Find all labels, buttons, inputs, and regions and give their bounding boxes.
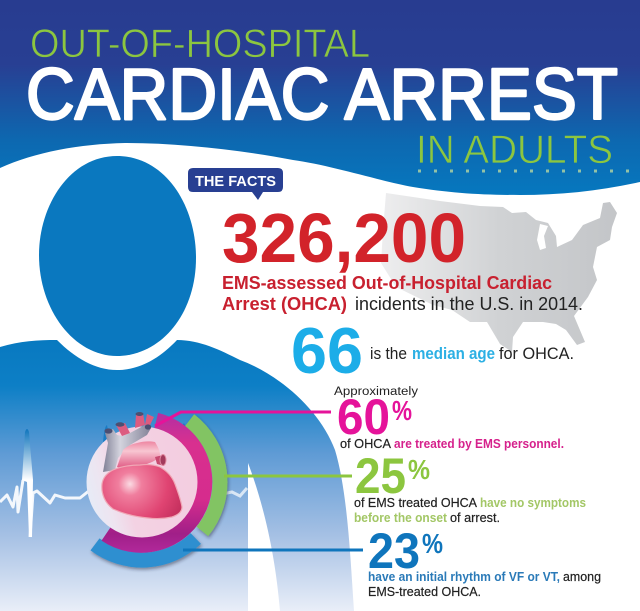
stat: 60 percent: 60 (337, 389, 390, 445)
stat: 60 percent: % (392, 395, 412, 426)
stat: 23 percent: % (422, 528, 443, 559)
stat: 25 percent: of arrest. (450, 511, 500, 525)
badge: the facts (188, 168, 283, 200)
badge: the facts: THE FACTS (195, 173, 276, 190)
stat: 23 percent: have an initial rhythm of VF or VT, (368, 570, 560, 584)
stat: 326,200 (222, 199, 583, 314)
stat: 23 percent: among (563, 570, 601, 584)
stat: 23 percent (368, 523, 601, 599)
stat: 25 percent: of EMS treated OHCA (354, 496, 478, 510)
stat: 326,200: EMS-assessed Out-of-Hospital Cardiac (222, 273, 552, 293)
person silhouette (0, 156, 354, 611)
stat: 25 percent (354, 448, 586, 525)
torso with shoulders (0, 340, 354, 611)
title line: out-of-hospital: OUT-OF-HOSPITAL (30, 22, 370, 66)
pale disc (86, 426, 198, 538)
small side vessel (155, 455, 164, 466)
map of the United States (381, 193, 617, 352)
stat: 23 percent: 23 (368, 523, 420, 579)
title line: cardiac arrest: CARDIAC ARREST (26, 55, 618, 135)
stat: 66 median age (291, 314, 574, 387)
connector: blue (183, 548, 363, 552)
stat: 326,200: 326,200 (222, 199, 466, 277)
pink vessels (116, 413, 154, 436)
head (39, 156, 196, 356)
vessel openings (104, 412, 151, 434)
grey vessels (103, 425, 151, 472)
ring: 60 percent magenta (106, 421, 204, 545)
stat: 60 percent (334, 386, 564, 451)
stat: 66 median age: for OHCA. (499, 345, 574, 363)
stat: 326,200: Arrest (OHCA) (222, 294, 347, 314)
connector: green (224, 474, 352, 478)
stat: 25 percent: % (408, 454, 430, 485)
lower ventricle (102, 465, 182, 519)
stat: 66 median age: median age (412, 345, 495, 363)
stat: 66 median age: is the (370, 345, 407, 363)
connector: magenta (155, 412, 331, 426)
stat: 326,200: incidents in the U.S. in 2014. (355, 294, 583, 314)
stat: 60 percent: Approximately (334, 386, 418, 398)
stat: 25 percent: have no symptoms (480, 496, 586, 510)
heart graphic (86, 412, 220, 560)
stat: 25 percent: 25 (355, 448, 406, 504)
stat: 60 percent: of OHCA (340, 437, 392, 451)
stat: 66 median age: 66 (291, 314, 363, 387)
blue sliver behind the vessels (103, 423, 188, 442)
ring: 23 percent blue (95, 538, 196, 560)
stat: 25 percent: before the onset (354, 511, 448, 525)
dotted line under title (418, 170, 640, 172)
title (26, 22, 618, 172)
stat: 60 percent: are treated by EMS personnel. (394, 437, 564, 451)
stat: 23 percent: EMS-treated OHCA. (368, 585, 481, 599)
upper chamber (117, 441, 160, 470)
ring: 25 percent green (190, 420, 220, 531)
title line: in adults: IN ADULTS (416, 128, 613, 172)
header banner (0, 0, 640, 195)
ECG pulse line (0, 429, 247, 537)
